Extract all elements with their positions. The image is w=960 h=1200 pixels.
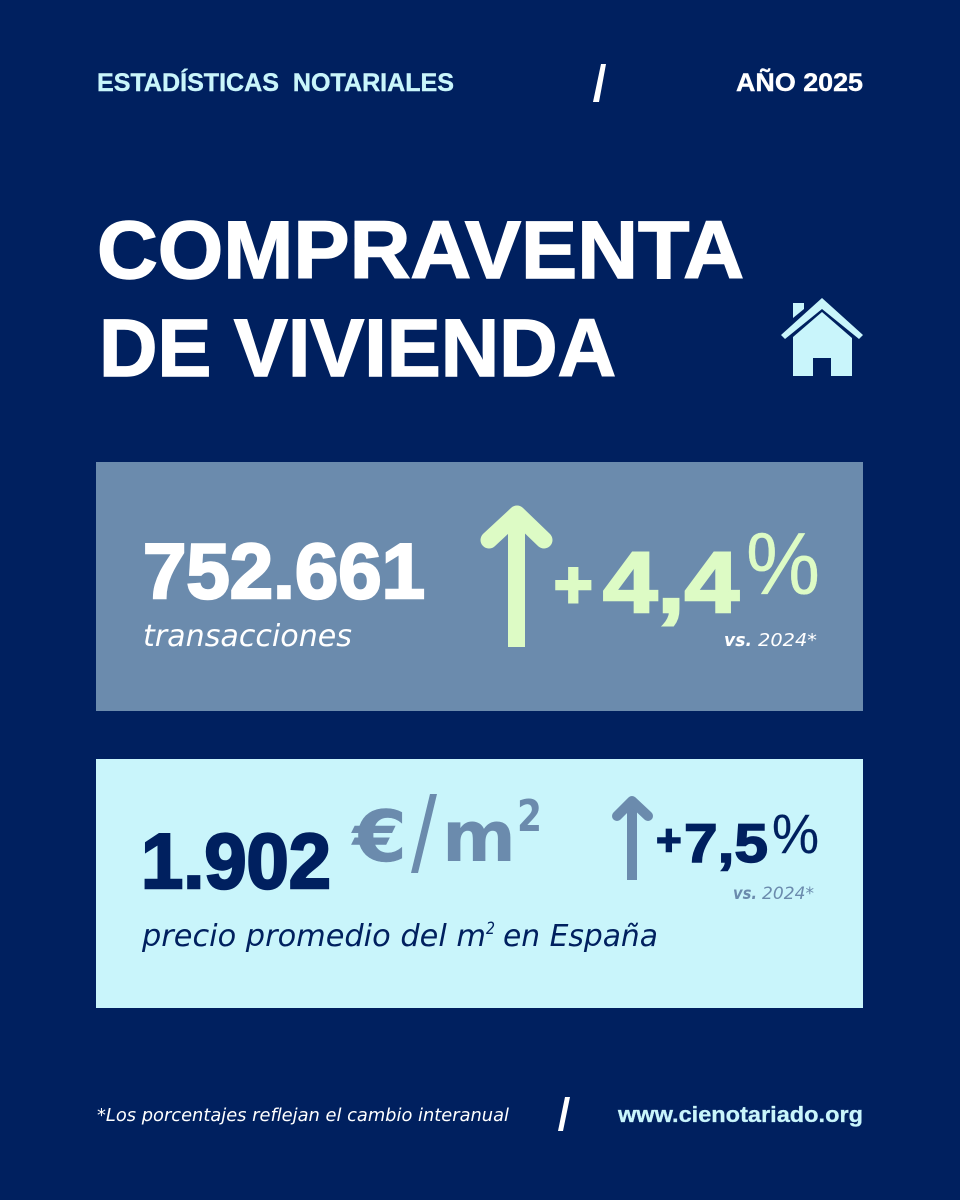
header: publication label: ESTADÍSTICAS NOTARIALES bbox=[97, 68, 454, 97]
comparison note: vs. bbox=[733, 884, 757, 904]
price change bbox=[656, 812, 768, 874]
transactions change bbox=[554, 535, 739, 631]
percent sign, navy: % bbox=[772, 802, 819, 865]
price label: precio promedio del m bbox=[141, 919, 486, 954]
icon: house bbox=[781, 298, 863, 376]
comparison note: 2024* bbox=[758, 630, 817, 651]
footnote: *Los porcentajes reflejan el cambio interanual bbox=[97, 1105, 509, 1126]
arrow: up, blue bbox=[617, 801, 648, 880]
transactions label: transacciones bbox=[143, 619, 352, 654]
title: DE VIVIENDA bbox=[99, 303, 616, 394]
transactions figure: 752.661 bbox=[143, 527, 425, 615]
price label: 2 bbox=[486, 919, 495, 939]
unit: € bbox=[351, 796, 407, 878]
price label: en España bbox=[503, 919, 658, 954]
price change: 7,5 bbox=[684, 812, 768, 874]
price change: + bbox=[656, 816, 682, 865]
panel: transactions bbox=[96, 462, 863, 711]
header: slash divider bbox=[593, 64, 606, 102]
transactions change: 4,4 bbox=[603, 535, 739, 631]
price figure: 1.902 bbox=[141, 817, 331, 905]
title bbox=[97, 205, 744, 394]
comparison note: 2024* bbox=[762, 884, 814, 904]
transactions change: + bbox=[554, 547, 593, 621]
price label bbox=[141, 919, 658, 954]
comparison note bbox=[724, 630, 817, 651]
unit: m bbox=[442, 796, 516, 878]
unit bbox=[351, 791, 542, 878]
comparison note bbox=[733, 884, 814, 904]
comparison note: vs. bbox=[724, 630, 752, 651]
title: COMPRAVENTA bbox=[97, 205, 744, 296]
footer: slash divider bbox=[558, 1097, 570, 1131]
header: year: AÑO 2025 bbox=[736, 67, 863, 97]
unit: 2 bbox=[517, 791, 542, 842]
footer: website: www.cienotariado.org bbox=[617, 1102, 863, 1127]
panel: price bbox=[96, 759, 863, 1008]
percent sign, green: % bbox=[746, 514, 820, 613]
arrow: up, green bbox=[489, 514, 544, 647]
